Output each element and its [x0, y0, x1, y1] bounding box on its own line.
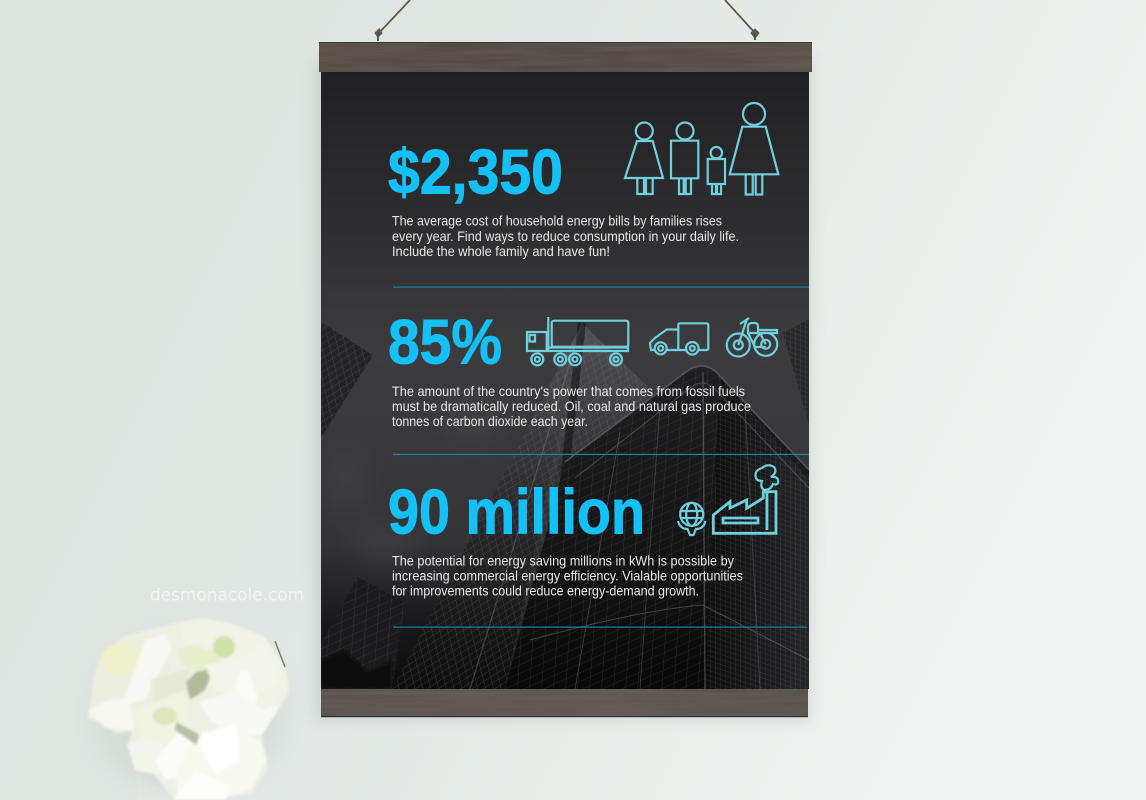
description: household bills: The average cost of household energy bills by families rises [392, 212, 722, 228]
building: top left [321, 322, 373, 438]
poster background with city photo [321, 72, 809, 689]
section: fossil fuels [388, 308, 777, 429]
vase [137, 765, 267, 800]
stat: 90 million: 90 million [388, 478, 645, 548]
section: commercial savings [388, 465, 778, 598]
stat: $2,350: $2,350 [388, 138, 563, 208]
flower bouquet in vase [88, 619, 288, 800]
description: commercial efficiency: for improvements could reduce energy-demand growth. [392, 582, 699, 598]
description: commercial efficiency: The potential for energy saving millions in kWh is possible by [392, 552, 734, 568]
description: household bills: Include the whole family and have fun! [392, 243, 610, 259]
petals [88, 619, 288, 800]
watermark: desmonacole.com [150, 586, 304, 606]
description: commercial efficiency: increasing commercial energy efficiency. Vialable opportunities [392, 568, 743, 584]
poster drop shadow [314, 60, 812, 722]
description: household bills: every year. Find ways to reduce consumption in your daily life. [392, 228, 739, 244]
description: fossil fuels: tonnes of carbon dioxide each year. [392, 413, 588, 429]
description: fossil fuels: must be dramatically reduced. Oil, coal and natural gas produce [392, 398, 751, 414]
divider line 2 [393, 454, 809, 455]
building: centre tower [392, 323, 648, 689]
icon: factory with smoke [713, 465, 778, 533]
icon: motorcycle [727, 318, 777, 356]
icon: family of four [625, 103, 778, 194]
flower shadow [94, 633, 286, 797]
icon: globe in hands [678, 503, 706, 535]
sky clouds [321, 398, 502, 569]
description: fossil fuels: The amount of the country's power that comes from fossil fuels [392, 383, 745, 399]
stat: 85%: 85% [388, 308, 502, 378]
building: top right [783, 319, 809, 425]
building: lower left [321, 577, 405, 689]
hanging cord [376, 0, 758, 41]
bottom wooden hanger bar [321, 689, 808, 717]
divider line 3 [393, 626, 807, 628]
divider line 1 [393, 286, 809, 288]
icon: truck [527, 317, 628, 365]
building: foreground tower [505, 366, 809, 689]
icon: delivery van [650, 323, 708, 355]
top wooden hanger bar [319, 42, 812, 72]
section: household energy cost [388, 103, 778, 259]
leaf stem [275, 641, 285, 667]
